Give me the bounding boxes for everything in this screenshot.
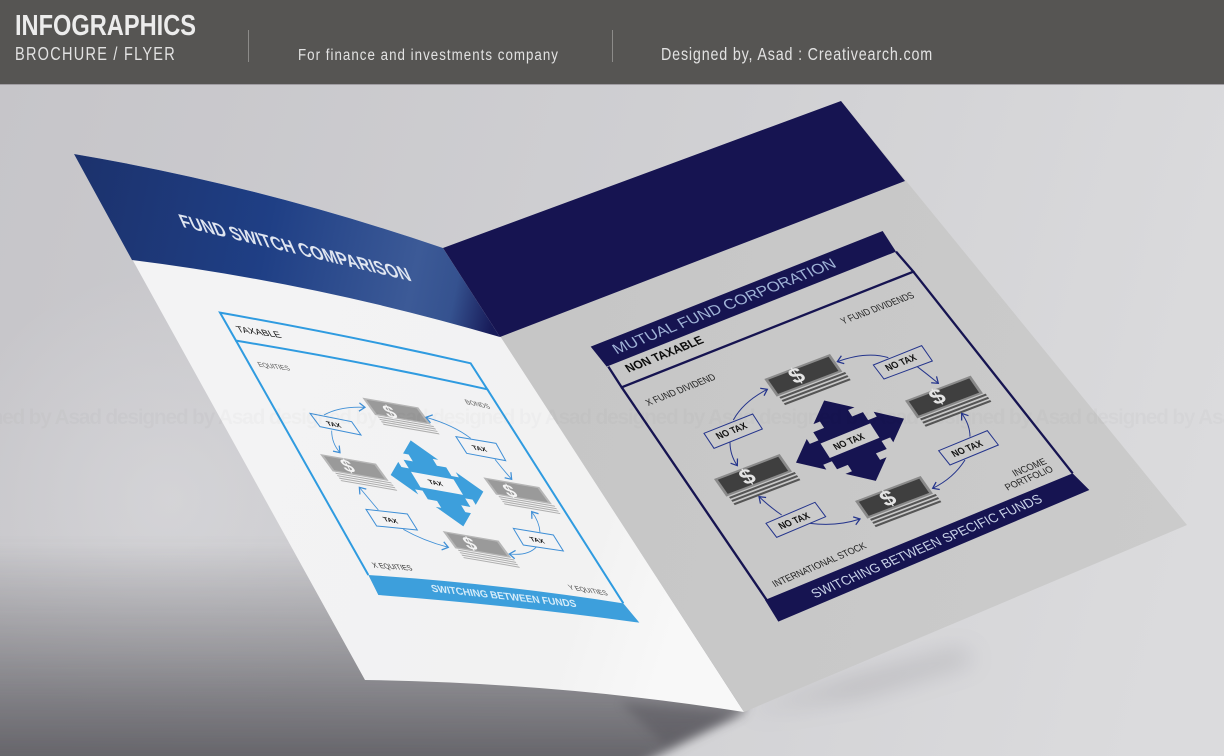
title: INFOGRAPHICS	[15, 10, 196, 42]
money stack right	[905, 375, 991, 428]
tax box with arrows, lower left	[359, 487, 448, 547]
no tax box with arrows, left	[704, 389, 767, 466]
panel: non taxable	[591, 231, 1089, 622]
no tax box with arrows, bottom	[759, 497, 860, 537]
label non taxable: NON TAXABLE	[622, 333, 706, 375]
money stack left: $	[734, 463, 761, 489]
header bar	[0, 0, 1224, 85]
band label: SWITCHING BETWEEN SPECIFIC FUNDS	[808, 492, 1045, 601]
money stack top: $	[783, 362, 810, 388]
label equities: EQUITIES	[256, 361, 292, 372]
central arrows	[770, 378, 930, 503]
tagline: For finance and investments company	[298, 47, 559, 64]
label x fund dividend: X FUND DIVIDEND	[644, 373, 718, 408]
no tax box with arrows, lower right: NO TAX	[950, 439, 986, 460]
central tax label: TAX	[426, 478, 445, 488]
left page blue header	[74, 154, 500, 337]
central no tax label: NO TAX	[831, 432, 867, 453]
band label: SWITCHING BETWEEN FUNDS	[430, 583, 578, 610]
divider one	[248, 30, 249, 62]
label y equities: Y EQUITIES	[566, 583, 609, 597]
bottom band	[765, 473, 1089, 622]
label bonds: BONDS	[463, 398, 492, 411]
tax box with arrows, upper right	[426, 417, 512, 479]
label x equities: X EQUITIES	[370, 561, 414, 572]
panel frame	[608, 252, 1073, 600]
tax box with arrows, upper left	[310, 407, 365, 453]
money stack top	[362, 398, 440, 434]
money stack bottom: $	[459, 533, 482, 555]
panel: taxable	[220, 313, 639, 623]
no tax box with arrows, upper right: NO TAX	[883, 353, 919, 374]
tax box with arrows, upper left: TAX	[325, 419, 343, 430]
label income portfolio: PORTFOLIO	[1003, 464, 1056, 493]
no tax box with arrows, bottom: NO TAX	[777, 511, 813, 532]
divider two	[612, 30, 613, 62]
money stack left	[320, 454, 397, 491]
money stack left: $	[336, 455, 360, 477]
panel title: MUTUAL FUND CORPORATION	[609, 256, 840, 358]
money stack right: $	[924, 383, 951, 409]
tax box with arrows, lower left: TAX	[381, 515, 400, 525]
label taxable: TAXABLE	[235, 325, 284, 341]
panel frame	[220, 313, 623, 603]
brochure left page	[74, 154, 744, 712]
bottom band	[368, 575, 639, 623]
no tax box with arrows, left: NO TAX	[714, 421, 750, 442]
money stack top: $	[379, 401, 402, 423]
money stack left	[714, 453, 800, 506]
money stack bottom	[443, 531, 520, 568]
brochure right page	[443, 101, 1187, 712]
no tax box with arrows, upper right	[837, 346, 938, 383]
heading: fund switch comparison: FUND SWITCH COMPARISON	[176, 211, 415, 286]
central arrows	[364, 432, 510, 535]
top band	[591, 231, 896, 367]
right page navy header	[443, 101, 905, 337]
tax box with arrows, lower right	[509, 512, 563, 554]
shadow at the fold tip	[620, 702, 744, 745]
money stack right: $	[499, 480, 522, 502]
money stack top	[764, 353, 851, 406]
label income portfolio: INCOME	[1010, 457, 1049, 479]
label y fund dividends: Y FUND DIVIDENDS	[839, 291, 917, 327]
tax box with arrows, upper right: TAX	[470, 443, 489, 454]
label international stock: INTERNATIONAL STOCK	[770, 541, 869, 590]
subtitle: BROCHURE / FLYER	[15, 43, 176, 64]
money stack bottom	[855, 475, 941, 528]
shadow under right page	[744, 650, 975, 712]
money stack right	[483, 477, 561, 514]
no tax box with arrows, lower right	[933, 413, 998, 488]
credit: Designed by, Asad : Creativearch.com	[661, 44, 933, 64]
money stack bottom: $	[874, 485, 901, 511]
tax box with arrows, lower right: TAX	[528, 535, 546, 545]
